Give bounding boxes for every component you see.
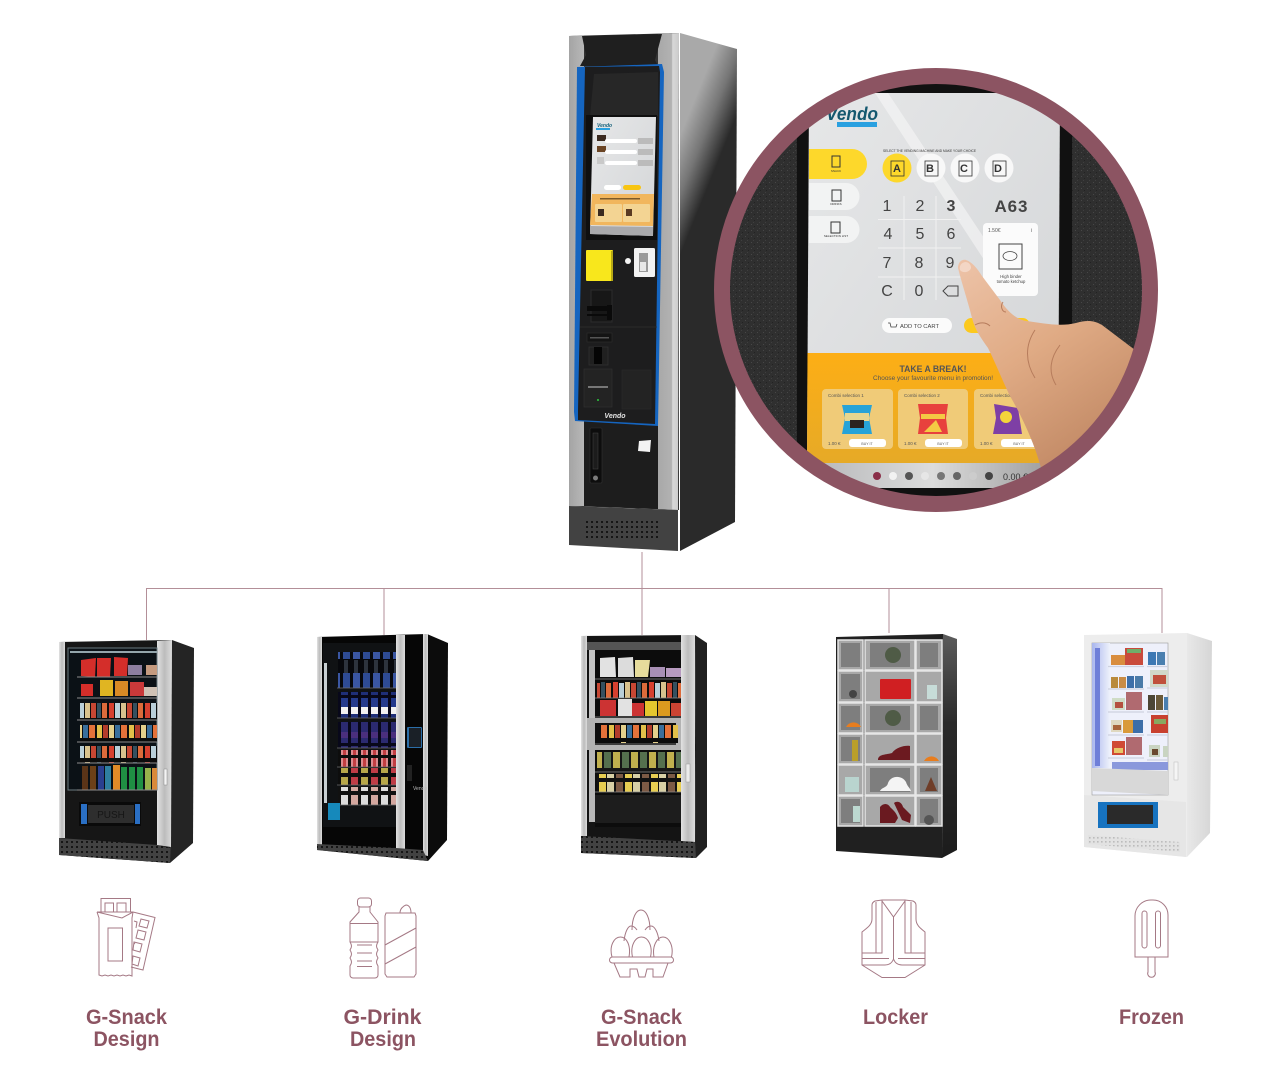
machine selector: A	[893, 163, 901, 175]
cart buttons: ADD TO CART	[900, 324, 939, 330]
front frame	[569, 33, 679, 510]
combi card 3: Combi selection 3	[980, 393, 1016, 398]
label: Locker: Locker	[863, 1006, 928, 1029]
Vendo logo	[828, 106, 878, 127]
row 5 products	[1112, 741, 1125, 755]
machine selector: SELECT THE VENDING MACHINE AND MAKE YOUR CHOICE	[883, 149, 977, 153]
machine selector: D	[994, 163, 1002, 175]
keypad: 7	[883, 255, 892, 272]
product card: i	[1031, 228, 1032, 234]
keypad: 9	[946, 255, 955, 272]
cart buttons	[882, 318, 1030, 333]
category tabs: SNACK	[831, 169, 841, 173]
kiosk screen	[586, 115, 657, 240]
coin return and ticket slot	[590, 428, 651, 483]
combi card 3: BUY IT	[1013, 442, 1025, 446]
icon: bottle and can	[350, 898, 416, 978]
label: G-Drink Design: G-Drink	[344, 1006, 422, 1029]
row 1 products	[1111, 655, 1125, 665]
payment controls: Vendo	[604, 413, 626, 420]
machine: G-Drink Design: Vendo	[413, 786, 427, 792]
keypad: 1	[883, 198, 892, 215]
combi card 1: BUY IT	[861, 442, 873, 446]
selected code: A63	[994, 197, 1028, 216]
keypad: 3	[947, 198, 956, 215]
machine selector: C	[960, 163, 968, 175]
combi card 1	[822, 389, 893, 449]
row 3 products	[1112, 698, 1125, 710]
combi card 2: BUY IT	[937, 442, 949, 446]
combi card 3: 1.00 €	[980, 441, 993, 446]
product card: 1.50€	[988, 228, 1001, 234]
keypad: 8	[915, 255, 924, 272]
combi card 2	[898, 389, 968, 449]
payment controls	[580, 248, 657, 420]
language strip: 0.00 €	[1003, 472, 1028, 482]
Vendo logo: Vendo	[826, 104, 878, 124]
machine selector	[882, 149, 1014, 182]
machine: G-Drink Design	[317, 634, 448, 861]
language strip	[824, 463, 1041, 488]
combi card 1: 1.00 €	[828, 441, 841, 446]
promotion band	[807, 353, 1059, 463]
lower door	[584, 420, 658, 509]
icon: safety vest	[862, 900, 925, 978]
row 4 products	[1111, 720, 1122, 732]
machine: Frozen	[1084, 633, 1212, 857]
row 2 products	[1111, 677, 1118, 688]
product card: tomato ketchup	[997, 279, 1026, 284]
connector tree	[146, 552, 1162, 640]
promotion band: TAKE A BREAK!	[900, 364, 966, 375]
label line: Design: Design	[94, 1028, 160, 1051]
keypad: 4	[884, 226, 893, 243]
machine: Locker	[836, 634, 957, 858]
combi card 1: Combi selection 1	[828, 393, 864, 398]
label: G-Snack Evolution: G-Snack	[601, 1006, 682, 1029]
ventilated base	[569, 506, 678, 551]
kiosk screen: Vendo	[597, 123, 612, 129]
main kiosk machine	[569, 33, 737, 551]
icon: egg tray	[610, 910, 674, 977]
keypad: 5	[916, 226, 925, 243]
lens ring	[722, 76, 1150, 504]
category tabs	[809, 149, 867, 243]
label: G-Snack Design: G-Snack	[86, 1006, 167, 1029]
hand pressing the screen	[958, 260, 1134, 468]
combi card 3	[974, 389, 1035, 449]
combi card 2: Combi selection 2	[904, 393, 940, 398]
magnified touchscreen lens	[714, 68, 1170, 512]
label: Frozen: Frozen	[1119, 1006, 1184, 1029]
keypad: C	[881, 283, 893, 300]
side panel	[680, 33, 737, 551]
category tabs: SELECTION LIST	[824, 234, 848, 238]
screen surface	[807, 93, 1060, 464]
textured background	[733, 135, 1142, 442]
icon: popsicle	[1135, 900, 1168, 977]
label line: Evolution: Evolution	[596, 1028, 687, 1051]
product card	[983, 223, 1038, 296]
machine: G-Snack Evolution	[581, 635, 707, 858]
combi card 2: 1.00 €	[904, 441, 917, 446]
keypad: 6	[947, 226, 956, 243]
icon: snack bars	[97, 898, 155, 976]
machine: G-Snack Design	[59, 640, 194, 863]
keypad: 2	[916, 198, 925, 215]
label line: Design: Design	[350, 1028, 416, 1051]
blue fascia	[574, 64, 664, 426]
machine: G-Snack Design: PUSH	[97, 810, 125, 821]
product card: High binder	[1000, 274, 1022, 279]
keypad	[878, 196, 961, 300]
keypad: 0	[915, 283, 924, 300]
machine selector: B	[926, 163, 934, 175]
category tabs: DRINKS	[830, 202, 842, 206]
promotion band: Choose your favourite menu in promotion!	[873, 376, 993, 382]
